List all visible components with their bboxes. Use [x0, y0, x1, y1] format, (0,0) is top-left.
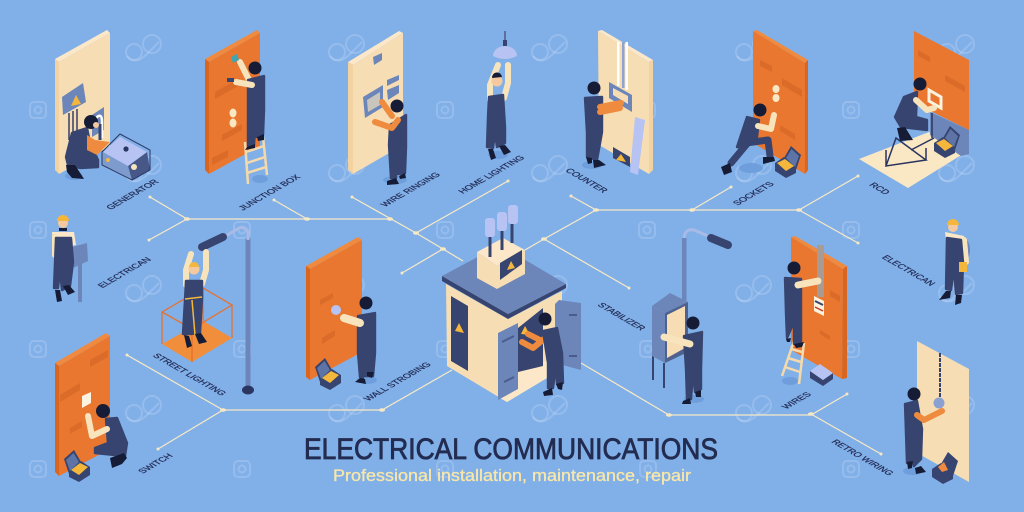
orange wall	[306, 237, 362, 380]
worker at wall	[344, 296, 377, 384]
panel: switch	[55, 333, 127, 482]
crouching worker	[65, 115, 110, 180]
beige wall	[348, 31, 403, 174]
beige wall	[598, 30, 653, 174]
toolbox	[64, 450, 90, 482]
tripod	[886, 113, 934, 166]
title: ELECTRICAL COMMUNICATIONS	[304, 433, 718, 466]
panel: wall strobing	[306, 237, 377, 390]
panel: wires	[782, 236, 847, 386]
panel: right electrician	[939, 219, 969, 305]
orange wall	[791, 236, 847, 379]
toolbox	[934, 126, 960, 158]
panel: RCD	[859, 31, 969, 188]
label: generator: GENERATOR	[104, 178, 161, 211]
worker on ladder	[227, 54, 264, 150]
label: switch: SWITCH	[136, 452, 175, 475]
label: electrican right: ELECTRICAN	[880, 254, 938, 287]
orange wall with lower blue section	[914, 31, 969, 156]
grinder tool	[331, 305, 341, 315]
open doors	[498, 300, 581, 400]
panel: junction box	[205, 30, 268, 184]
panel: retro wiring	[903, 341, 969, 484]
ladder	[782, 341, 804, 385]
leaning tube	[630, 117, 645, 175]
ladder	[245, 137, 268, 184]
crouching worker	[88, 404, 127, 468]
label: junction box: JUNCTION BOX	[236, 173, 303, 212]
pole and box	[72, 243, 88, 302]
label: counter: COUNTER	[563, 167, 611, 194]
beige brick wall	[55, 30, 110, 174]
electrician	[52, 215, 76, 302]
toolbox	[775, 146, 801, 178]
sockets	[230, 108, 236, 128]
electrician with cable coil	[939, 219, 969, 305]
panel: counter	[582, 30, 653, 175]
label: rcd: RCD	[867, 181, 893, 196]
worker on platform	[183, 252, 207, 348]
panel: central transformer building	[442, 205, 581, 402]
worker at building	[522, 312, 563, 396]
roof	[442, 245, 566, 319]
label: retro wiring: RETRO WIRING	[829, 438, 896, 477]
label: sockets: SOCKETS	[730, 180, 776, 207]
floor	[859, 132, 963, 188]
toolbox	[315, 358, 341, 390]
beige wall	[917, 341, 969, 482]
toolbox	[932, 452, 958, 484]
door opening	[518, 308, 543, 372]
label: wires: WIRES	[779, 391, 813, 410]
worker at cabinet	[664, 316, 704, 404]
cable and junction device	[934, 353, 944, 408]
label: wall strobing: WALL STROBING	[361, 361, 433, 402]
closed toolbox	[810, 364, 833, 386]
orange wall	[753, 30, 808, 174]
building body	[446, 284, 562, 402]
warning box	[613, 147, 630, 167]
control cabinet	[652, 293, 688, 388]
label: street lighting: STREET LIGHTING	[151, 352, 229, 397]
insulators	[485, 205, 518, 257]
street lamp	[202, 228, 254, 394]
label: home lighting: HOME LIGHTING	[456, 154, 527, 195]
panel: stabilizer	[652, 230, 728, 404]
subtitle: Professional installation, maintenance, repair	[333, 466, 691, 485]
kneeling worker	[721, 104, 775, 175]
generator	[102, 134, 150, 180]
ceiling lamp	[493, 31, 517, 59]
wall sockets	[772, 85, 780, 102]
connector lines	[126, 174, 882, 456]
panel: street lighting	[162, 228, 254, 394]
worker reaching up	[487, 65, 511, 160]
panel: home lighting	[487, 31, 517, 160]
panel: wire ringing	[348, 31, 407, 185]
switch plate	[82, 392, 91, 408]
label: wire ringing: WIRE RINGING	[378, 171, 443, 208]
electrical panel with warning sign	[62, 83, 104, 140]
orange wall	[205, 30, 260, 174]
worker at wall	[903, 388, 942, 475]
street lamp	[682, 230, 728, 308]
panel: generator	[55, 30, 150, 180]
panel: sockets	[721, 30, 808, 178]
wiring on wall	[814, 245, 824, 316]
white frame	[929, 90, 941, 108]
orange wall	[55, 333, 110, 476]
lift platform	[162, 288, 232, 362]
wall boxes	[363, 53, 399, 118]
pipes and counter frame	[609, 42, 632, 112]
label: stabilizer: STABILIZER	[595, 301, 648, 332]
left door	[451, 296, 468, 371]
worker on ladder	[785, 262, 818, 348]
crouching worker	[895, 78, 934, 141]
panel: left electrician	[52, 215, 88, 302]
worker at panel	[375, 100, 407, 185]
worker at counter	[582, 82, 621, 169]
label: electrican left: ELECTRICAN	[95, 256, 153, 289]
transformer box	[477, 238, 525, 289]
